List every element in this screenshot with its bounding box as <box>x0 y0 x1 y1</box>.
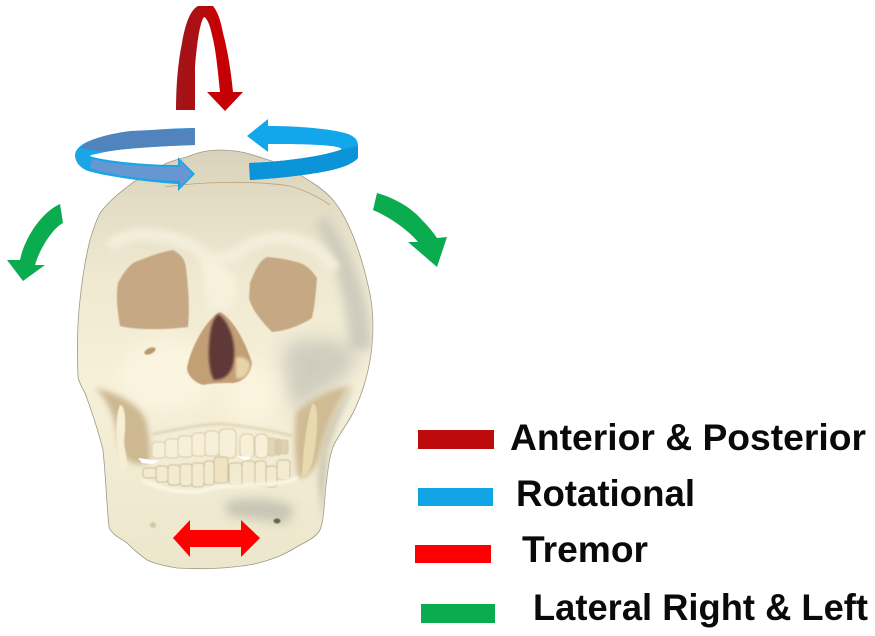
arrow: rotational right <box>247 119 358 180</box>
arrow: lateral left <box>7 204 63 281</box>
legend item: tremor: Tremor <box>522 529 648 570</box>
mental foramen right <box>274 518 280 524</box>
arrow: tremor <box>173 520 260 557</box>
legend <box>415 417 868 628</box>
legend item: rotational <box>418 473 695 514</box>
left jaw recess <box>95 388 150 464</box>
mental foramen left <box>150 522 156 528</box>
infraorbital foramen left <box>143 346 157 356</box>
legend item: tremor <box>415 529 648 570</box>
right jaw recess <box>295 386 350 478</box>
lower jaw gum line <box>142 478 298 492</box>
nasal cavity <box>187 312 252 385</box>
upper teeth <box>152 429 288 458</box>
skull shading <box>110 182 372 524</box>
arrow: lateral right <box>373 193 447 267</box>
legend item: rotational: Rotational <box>516 473 695 514</box>
legend item: lateral right and left: Lateral Right & Left <box>533 587 868 628</box>
skull illustration <box>77 150 373 569</box>
arrow: anterior and posterior <box>176 6 243 111</box>
legend item: anterior and posterior: Anterior & Posterior <box>510 417 866 458</box>
upper jaw ridge <box>152 424 292 436</box>
right eye socket <box>249 257 317 332</box>
arrow: rotational left <box>75 128 195 191</box>
gap flashes between teeth <box>138 456 252 464</box>
lower teeth <box>143 457 290 487</box>
left eye socket <box>117 250 189 329</box>
